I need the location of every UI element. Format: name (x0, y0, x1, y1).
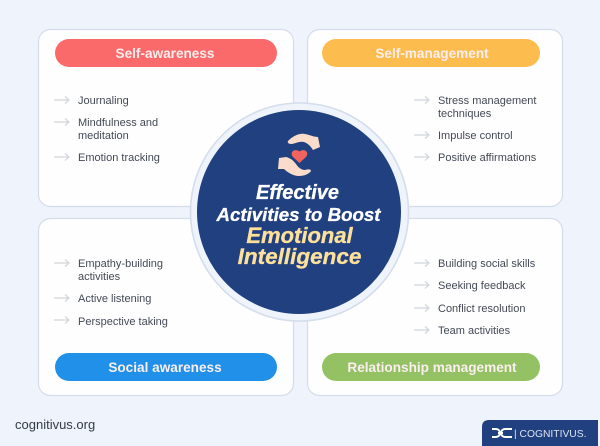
logo text: | COGNITIVUS. (514, 429, 586, 440)
title: Activities to Boost (215, 204, 381, 225)
logo badge (482, 420, 598, 446)
list: self-awareness items: meditation (78, 130, 129, 142)
panel: self-awareness (38, 30, 294, 206)
list: social awareness items: Active listening (78, 293, 151, 305)
list: social awareness items: Perspective taking (78, 316, 168, 328)
list: relationship management items: Conflict resolution (438, 303, 525, 315)
list: self-awareness items: Mindfulness and (78, 117, 158, 129)
panel: social awareness (38, 218, 294, 396)
list: social awareness items: activities (78, 271, 121, 283)
list: social awareness items (54, 258, 168, 328)
heading: self-awareness (55, 39, 277, 67)
icon: logo mark (492, 429, 512, 437)
list: self-management items: Impulse control (438, 130, 513, 142)
heading: social awareness (55, 353, 277, 381)
list: self-management items (414, 95, 537, 164)
list: social awareness items: Empathy-building (78, 258, 163, 270)
list: relationship management items (414, 258, 536, 337)
title (215, 182, 381, 269)
central circle (190, 103, 408, 321)
title: Effective (256, 182, 339, 204)
panel: self-management (308, 30, 562, 206)
panel: relationship management (308, 218, 562, 396)
heading: self-management: Self-management (375, 46, 489, 61)
list: relationship management items: Building social skills (438, 258, 536, 270)
list: relationship management items: Seeking feedback (438, 280, 526, 292)
heading: self-awareness: Self-awareness (116, 46, 214, 61)
list: self-management items: Positive affirmations (438, 152, 537, 164)
title: Emotional (246, 223, 354, 248)
heading: self-management (322, 39, 540, 67)
list: relationship management items: Team activities (438, 325, 511, 337)
title: Intelligence (238, 244, 361, 269)
heading: relationship management: Relationship management (347, 360, 517, 375)
list: self-awareness items: Journaling (78, 95, 129, 107)
website url: cognitivus.org (15, 417, 95, 432)
icon: hands holding heart (278, 134, 320, 176)
list: self-management items: techniques (438, 108, 492, 120)
list: self-awareness items (54, 95, 160, 164)
heading: social awareness: Social awareness (108, 360, 222, 375)
list: self-management items: Stress management (438, 95, 536, 107)
heading: relationship management (322, 353, 540, 381)
list: self-awareness items: Emotion tracking (78, 152, 160, 164)
